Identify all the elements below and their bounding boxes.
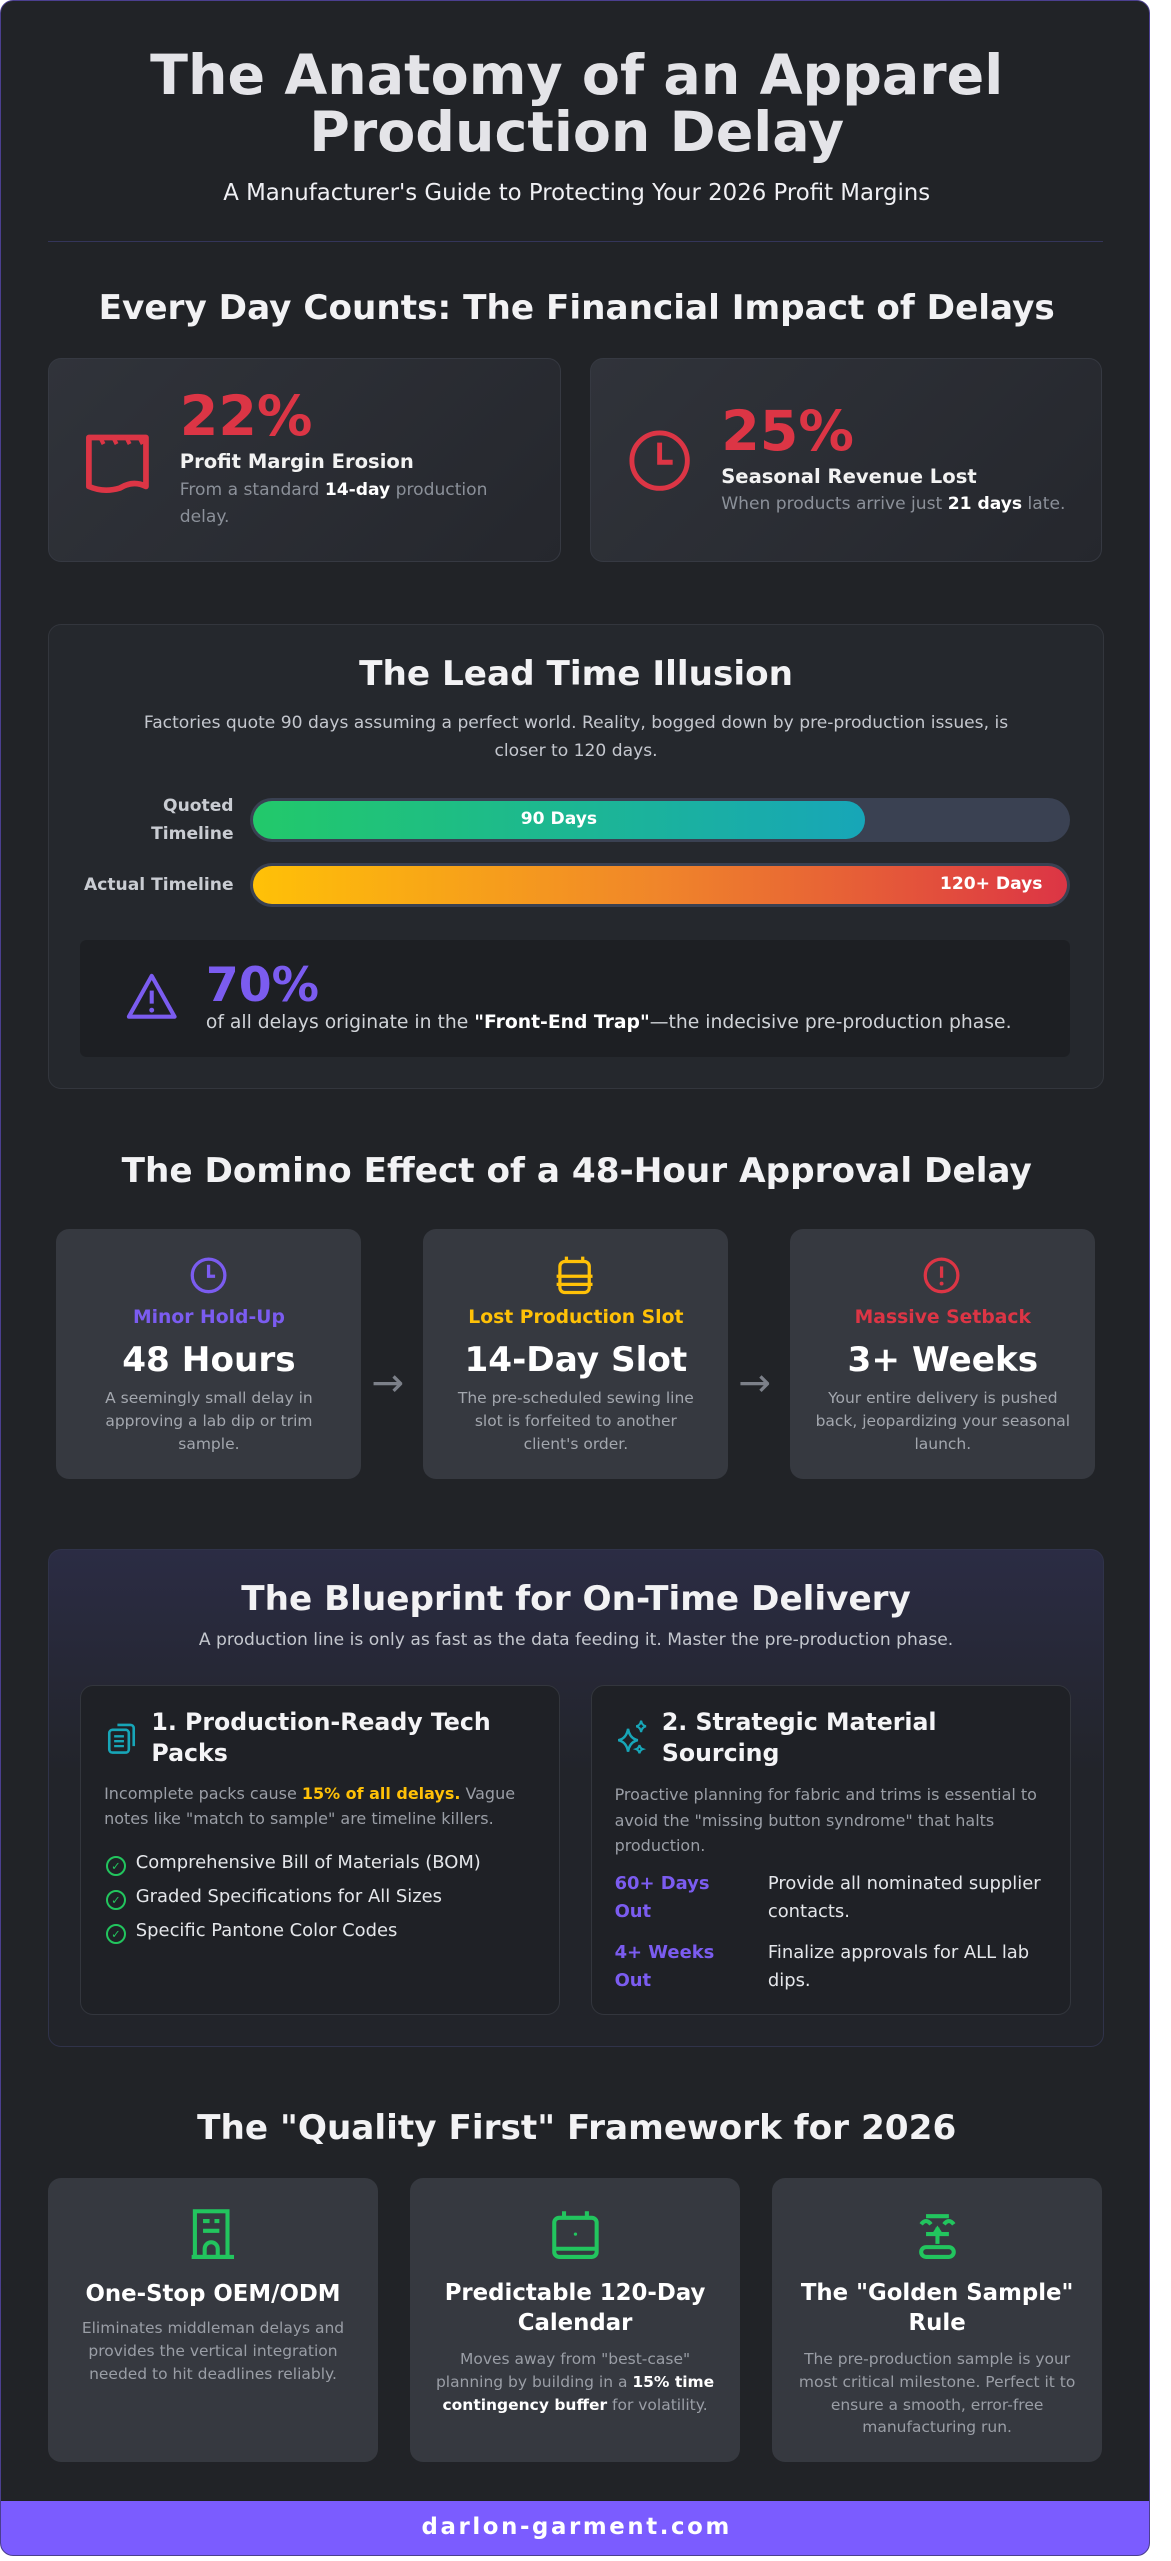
heading: domino: The Domino Effect of a 48-Hour Approval Delay: [122, 1151, 1032, 1191]
domino card 1: 48 Hours: [122, 1340, 296, 1380]
icon: slot: [556, 1256, 592, 1294]
domino card 3: [790, 1229, 1095, 1479]
card: calendar: [410, 2178, 740, 2462]
card: golden sample: [772, 2178, 1102, 2462]
domino card 3: Your entire delivery is pushed back, jeopardizing your seasonal launch.: [816, 1389, 1070, 1453]
sub-card: material sourcing: Finalize approvals for ALL lab dips.: [768, 1942, 1029, 1991]
domino card 1: Minor Hold-Up: [133, 1307, 285, 1328]
sub-card: material sourcing: Provide all nominated supplier contacts.: [768, 1873, 1041, 1922]
card: calendar: Moves away from "best-case" planning by building in a 15% time contingency buffer for volatility.: [436, 2350, 714, 2414]
title: The Anatomy of an Apparel: [150, 44, 1003, 108]
checklist: Specific Pantone Color Codes: [136, 1920, 397, 1941]
checklist: [106, 1852, 481, 1944]
icon: sparkles: [618, 1720, 646, 1754]
icon: clipboard: [108, 1724, 135, 1754]
domino card 2: Lost Production Slot: [468, 1307, 683, 1328]
icon: calendar: [552, 2211, 599, 2259]
checklist: Graded Specifications for All Sizes: [136, 1886, 442, 1907]
stat text: From a standard 14-day production delay.: [180, 480, 487, 527]
chart: timelines: [84, 796, 1070, 907]
domino card 1: A seemingly small delay in approving a lab dip or trim sample.: [105, 1389, 313, 1453]
chart: timelines: Actual Timeline: [84, 875, 234, 895]
subtitle: A Manufacturer's Guide to Protecting Your 2026 Profit Margins: [223, 180, 930, 206]
timeline rows: [615, 1873, 1041, 1991]
checklist: Comprehensive Bill of Materials (BOM): [136, 1852, 481, 1873]
stat text: [180, 385, 487, 527]
footer: [1, 2501, 1152, 2557]
stat text: 22%: [180, 385, 312, 449]
icon: trophy: [919, 2214, 956, 2259]
stat text: 25%: [721, 400, 854, 464]
arrow: →: [738, 1361, 771, 1406]
heading: The Blueprint for On-Time Delivery: [241, 1579, 911, 1619]
domino card 3: 3+ Weeks: [848, 1340, 1038, 1380]
description: Factories quote 90 days assuming a perfect world. Reality, bogged down by pre-production issues, is closer to 120 days.: [144, 713, 1008, 761]
chart: timelines: Timeline: [151, 824, 234, 844]
card: one-stop: One-Stop OEM/ODM: [85, 2281, 341, 2307]
callout: 70%: [80, 940, 1070, 1057]
sub-card: material sourcing: [591, 1685, 1071, 2015]
card: golden sample: The pre-production sample is your most critical milestone. Perfect it to ensure a smooth, error-free manufacturing run.: [799, 2350, 1075, 2436]
card: one-stop: [48, 2178, 378, 2462]
chart: timelines: Quoted: [163, 796, 234, 816]
description: A production line is only as fast as the data feeding it. Master the pre-production phase.: [199, 1630, 953, 1650]
callout: 70%: 70%: [206, 958, 319, 1013]
heading: financial impact: Every Day Counts: The Financial Impact of Delays: [99, 288, 1055, 328]
stat text: When products arrive just 21 days late.: [721, 494, 1065, 514]
sub-card: tech packs: 1. Production-Ready Tech Packs: [151, 1708, 491, 1767]
callout: 70%: of all delays originate in the "Front-End Trap"—the indecisive pre-production phase.: [206, 1012, 1012, 1032]
heading: The Lead Time Illusion: [359, 654, 793, 694]
stat text: Profit Margin Erosion: [180, 450, 414, 473]
stat text: Seasonal Revenue Lost: [721, 465, 977, 488]
sub-card: material sourcing: 4+ Weeks Out: [615, 1942, 714, 1991]
checklist: ✓: [111, 1859, 121, 1873]
card: one-stop: Eliminates middleman delays and provides the vertical integration needed to hit deadlines reliably.: [82, 2319, 344, 2383]
stat card: 22%: [48, 358, 561, 562]
title: Production Delay: [309, 101, 844, 165]
title: [150, 44, 1003, 165]
sub-card: material sourcing: 60+ Days Out: [615, 1873, 710, 1922]
stat text: [721, 400, 1065, 514]
panel: blueprint: [48, 1549, 1104, 2046]
icon: receipt: [86, 434, 149, 493]
domino card 1: [56, 1229, 361, 1479]
domino card 2: [423, 1229, 728, 1479]
card: golden sample: The "Golden Sample" Rule: [801, 2280, 1073, 2336]
stat card: 25%: [590, 358, 1102, 562]
footer: darlon-garment.com: [422, 2514, 732, 2540]
arrow: →: [371, 1361, 404, 1406]
sub-card: material sourcing: Proactive planning for fabric and trims is essential to avoid the "missing button syndrome" that halts production.: [615, 1785, 1037, 1855]
panel: lead time illusion: [48, 624, 1104, 1089]
domino card 2: 14-Day Slot: [464, 1340, 687, 1380]
checklist: ✓: [111, 1927, 121, 1941]
icon: factory: [192, 2209, 234, 2259]
chart: timelines: 120+ Days: [940, 874, 1042, 894]
domino card 3: Massive Setback: [855, 1307, 1031, 1328]
checklist: ✓: [111, 1893, 121, 1907]
domino card 2: The pre-scheduled sewing line slot is forfeited to another client's order.: [458, 1389, 694, 1453]
icon: clock: [629, 430, 690, 491]
card: calendar: Predictable 120-Day Calendar: [445, 2280, 705, 2336]
sub-card: tech packs: [80, 1685, 560, 2015]
sub-card: tech packs: Incomplete packs cause 15% of all delays. Vague notes like "match to sample" are timeline killers.: [104, 1784, 515, 1828]
heading: quality first: The "Quality First" Framework for 2026: [197, 2108, 956, 2148]
icon: alert: [924, 1258, 960, 1294]
chart: timelines: 90 Days: [521, 809, 597, 829]
sub-card: material sourcing: 2. Strategic Material Sourcing: [662, 1708, 937, 1767]
icon: clock: [190, 1258, 226, 1294]
icon: warning: [126, 974, 177, 1019]
